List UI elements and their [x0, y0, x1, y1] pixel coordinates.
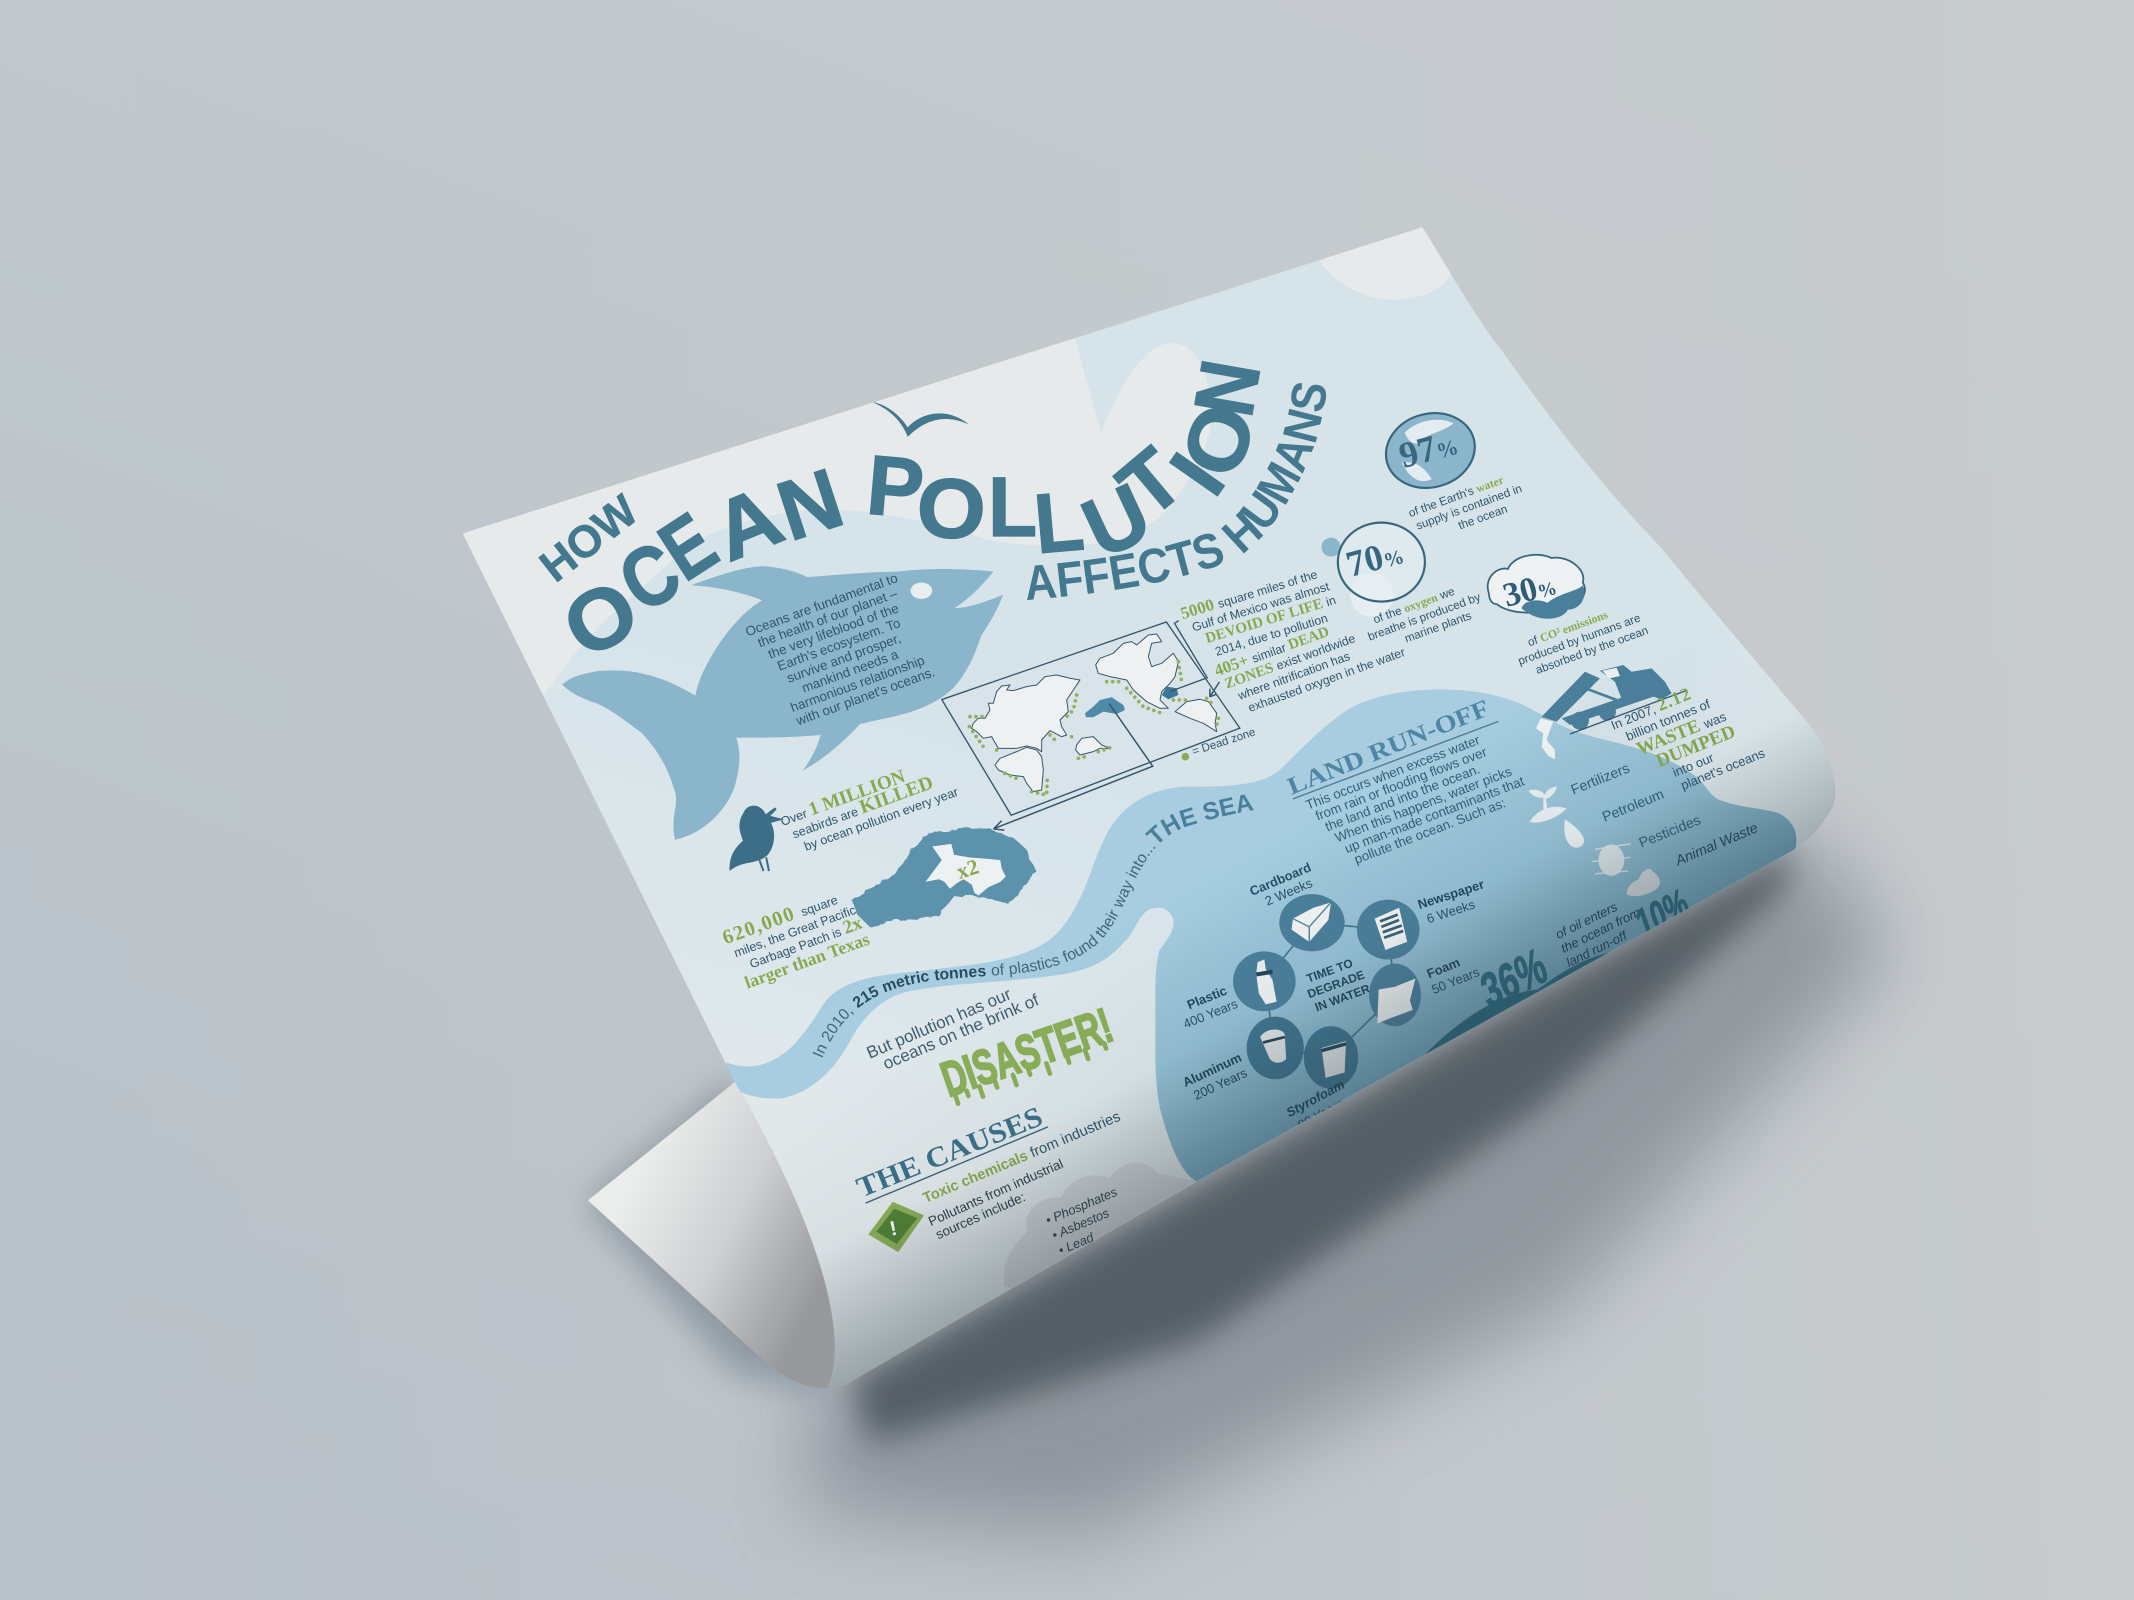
cycle title: TIME TO: [1305, 956, 1355, 986]
patch text: miles, the Great Pacific: [732, 903, 858, 960]
disaster callout: [864, 975, 1119, 1107]
land run-off panel: [1284, 695, 1761, 896]
white upper area: [463, 338, 1211, 696]
icon: oil drop: [1564, 819, 1584, 848]
seabird text: seabirds are: [791, 803, 863, 841]
gulf of mexico stat: Gulf of Mexico was almost: [1190, 579, 1332, 634]
degrade cycle: [1175, 859, 1491, 1134]
garbage patch blob: [852, 827, 1037, 927]
dead zones stat: exhausted oxygen in the water: [1246, 645, 1407, 715]
title: Pollution: T: [1101, 430, 1201, 535]
icon: dump truck: [1542, 665, 1686, 734]
title: Ocean: N: [767, 450, 854, 559]
water caption: the ocean: [1457, 503, 1509, 532]
contaminant labels: Animal Waste: [1672, 820, 1761, 870]
stat: 70% oxygen: 70%: [1342, 530, 1407, 585]
stat: 30% CO2: [1488, 555, 1650, 681]
toxic chemicals line: Toxic chemicals from industries: [921, 1109, 1123, 1207]
sea and land run-off water: [708, 689, 1810, 1211]
garbage patch marker: [1085, 697, 1125, 717]
pollutant list: • Asbestos: [1050, 1205, 1112, 1243]
cycle connector: [1264, 923, 1395, 1057]
contaminant labels: Pesticides: [1637, 812, 1703, 852]
waste text: planet's oceans: [1679, 745, 1767, 793]
gulf bracket: [1170, 621, 1207, 691]
pointer lines: [994, 704, 1153, 830]
disaster callout: But pollution has our: [864, 984, 1014, 1063]
disaster word: [935, 999, 1119, 1107]
cardboard node: 2 Weeks: [1263, 875, 1315, 909]
newspaper node: 6 Weeks: [1425, 897, 1477, 926]
white corner blob: [1319, 228, 1451, 300]
title: Pollution: I: [1152, 438, 1242, 511]
title: Pollution: O: [914, 461, 988, 558]
dolphin text: the health of our planet –: [756, 585, 900, 650]
title: Affects Humans: AFFECTS HUMANS: [1027, 383, 1326, 600]
title: Pollution: P: [863, 438, 928, 536]
land run-off text: When this happens, water picks: [1333, 764, 1514, 845]
36 percent figure: 36%: [1475, 937, 1553, 1020]
CO2 caption: absorbed by the ocean: [1534, 624, 1650, 677]
dolphin text: survive and prosper,: [785, 631, 903, 686]
dead zones stat: exist worldwide: [1274, 631, 1357, 673]
pollutants text: sources include:: [933, 1189, 1027, 1242]
icon: plant: [1528, 787, 1566, 823]
title: Ocean: A: [701, 469, 795, 580]
gulf of mexico stat: 5000 square miles of the: [1178, 567, 1319, 623]
icon: bug: [1592, 844, 1630, 875]
title: Pollution: O: [1164, 392, 1275, 489]
stat: 30% CO2: 30%: [1499, 565, 1560, 615]
land run-off text: the land and into the ocean.: [1323, 761, 1482, 834]
waste text: WASTE: [1634, 714, 1708, 760]
disaster callout: oceans on the brink of: [880, 990, 1042, 1073]
dead zone arrow: [1210, 682, 1219, 697]
gulf of mexico stat: 2014, due to pollution: [1213, 611, 1330, 659]
dolphin shape: [562, 566, 1003, 840]
title: [538, 360, 1326, 650]
patch text: Garbage Patch is: [748, 924, 847, 971]
seabird text: Over 1 MILLION: [779, 766, 908, 829]
oil caption: the ocean from: [1558, 905, 1643, 956]
causes section: [853, 1101, 1133, 1258]
plastic node: [1175, 951, 1296, 1031]
contaminant labels: Fertilizers: [1569, 761, 1632, 799]
map frame: [942, 622, 1240, 815]
paper cast shadow: [585, 830, 1892, 1538]
aluminum node: Aluminum: [1180, 1050, 1244, 1090]
dolphin text: harmonious relationship: [788, 653, 927, 715]
dolphin text: Oceans are fundamental to: [743, 570, 900, 639]
icon: gull: [871, 402, 969, 437]
foam node: Foam: [1425, 955, 1462, 981]
title: Ocean: O: [548, 562, 654, 677]
land run-off text: up man-made contaminants that: [1342, 773, 1527, 856]
oil caption: of oil enters: [1553, 899, 1620, 942]
styrofoam node: [1284, 1026, 1358, 1134]
patch text: larger than Texas: [742, 929, 872, 992]
stat: 97% water: [1377, 403, 1529, 547]
cloud patches: [1004, 1162, 1196, 1288]
aluminum node: 200 Years: [1191, 1065, 1249, 1103]
oxygen caption: of the oxygen we: [1372, 585, 1457, 626]
curled paper back flap: [588, 1082, 835, 1388]
map legend: = Dead zone: [1191, 726, 1257, 758]
waste truck stat: [1536, 665, 1767, 809]
icon: seabird: [731, 807, 778, 868]
title: Ocean: C: [603, 522, 696, 630]
plastic node: Plastic: [1185, 983, 1229, 1012]
aluminum node: [1180, 1017, 1304, 1105]
contaminant labels: [1569, 761, 1761, 870]
stat: 97% water: 97%: [1395, 421, 1462, 476]
title: Pollution: [870, 360, 1260, 554]
dead zones stat: 405+ similar DEAD: [1212, 624, 1331, 680]
newspaper node: Newspaper: [1416, 876, 1486, 912]
dolphin panel: [562, 566, 1003, 840]
dolphin text: Earth's ecosystem. To: [775, 615, 902, 674]
land run-off text: pollute the ocean. Such as:: [1352, 795, 1508, 867]
cycle title: IN WATER: [1313, 981, 1372, 1014]
map dead zone dots: [969, 662, 1218, 795]
icon: animal waste: [1626, 869, 1660, 896]
dolphin text: mankind needs a: [800, 647, 901, 696]
icon: pouring waste: [1536, 718, 1555, 759]
seabird text: KILLED: [856, 772, 936, 818]
texas: [925, 844, 1006, 896]
globe: [1377, 403, 1483, 498]
icon: hazard sign: !: [888, 1218, 899, 1241]
patch text: 620,000 square: [720, 893, 840, 949]
icon: hazard sign: [868, 1202, 924, 1252]
title: Ocean: E: [644, 496, 733, 599]
waste text: billion tonnes of: [1623, 696, 1713, 744]
gulf marker: [1162, 687, 1178, 699]
seabird text: by ocean pollution every year: [802, 785, 960, 854]
title: How: HOW: [530, 484, 648, 592]
patch text: 2x: [840, 912, 866, 939]
plastic node: 400 Years: [1181, 996, 1240, 1031]
waste text: was: [1701, 709, 1728, 732]
seabird stat: [730, 769, 957, 872]
patch stat: x2: [954, 854, 982, 884]
oil hump: [1424, 952, 1608, 1055]
foam node: [1369, 949, 1482, 1026]
oil caption: land run-off: [1564, 927, 1630, 970]
gulf of mexico stat: DEVOID OF LIFE: [1204, 595, 1329, 647]
CO2 caption: of CO² emissions: [1526, 608, 1610, 649]
cycle title: DEGRADE: [1306, 968, 1367, 1001]
title: Pollution: L: [1031, 474, 1087, 572]
patch stat: [720, 827, 1037, 994]
world map with dead zones: [942, 621, 1257, 830]
dolphin text: the very lifeblood of the: [766, 601, 901, 662]
dead zones stat: where nitrification has: [1235, 649, 1352, 703]
waste text: into our: [1670, 750, 1717, 780]
dead zones stat: ZONES: [1223, 659, 1280, 692]
oxygen caption: marine plants: [1403, 609, 1473, 645]
waste text: In 2007, 2.12: [1609, 683, 1694, 733]
pollutant list: • Phosphates: [1043, 1184, 1119, 1228]
land run-off text: This occurs when excess water: [1304, 732, 1482, 813]
title: Ocean: [568, 468, 844, 650]
newspaper node: [1357, 876, 1491, 960]
gulf of mexico stat: in: [1324, 593, 1338, 609]
waste text: DUMPED: [1653, 721, 1739, 772]
cardboard node: Cardboard: [1247, 859, 1313, 899]
second clipped figure: 10%: [1631, 879, 1694, 948]
cardboard node: [1247, 859, 1345, 951]
map continents: [972, 634, 1217, 792]
infographic sheet: [462, 228, 1836, 1388]
title: Pollution: N: [1176, 353, 1278, 423]
title: Pollution: U: [1069, 465, 1164, 576]
causes heading: THE CAUSES: [853, 1101, 1047, 1204]
title: Pollution: L: [988, 461, 1037, 555]
water caption: of the Earth's water: [1407, 474, 1506, 520]
oxygen caption: breathe is produced by: [1366, 591, 1483, 644]
stat: 70% oxygen: [1322, 523, 1487, 657]
disaster word: DISASTER!: [935, 999, 1119, 1107]
styrofoam node: 80 Years: [1295, 1095, 1347, 1133]
foam node: 50 Years: [1429, 964, 1482, 997]
dolphin eye: [910, 583, 932, 599]
pollutants text: Pollutants from industrial: [926, 1156, 1065, 1229]
land run-off text: from rain or flooding flows over: [1313, 744, 1489, 823]
water caption: supply is contained in: [1414, 482, 1524, 533]
CO2 caption: produced by humans are: [1516, 612, 1642, 668]
infographic sheet: In 2010, 215 metric tonnes of plastics found their way into...THE SEA: [812, 794, 1254, 1058]
land run-off heading: LAND RUN-OFF: [1284, 695, 1493, 800]
dolphin text: with our planet's oceans.: [793, 664, 937, 729]
pollutant list: • Lead: [1056, 1229, 1097, 1258]
contaminant labels: Petroleum: [1600, 787, 1666, 826]
styrofoam node: Styrofoam: [1284, 1077, 1347, 1120]
oil stat: [1475, 879, 1694, 1020]
river text: [822, 803, 1293, 1059]
paper shading: [408, 204, 1905, 1429]
